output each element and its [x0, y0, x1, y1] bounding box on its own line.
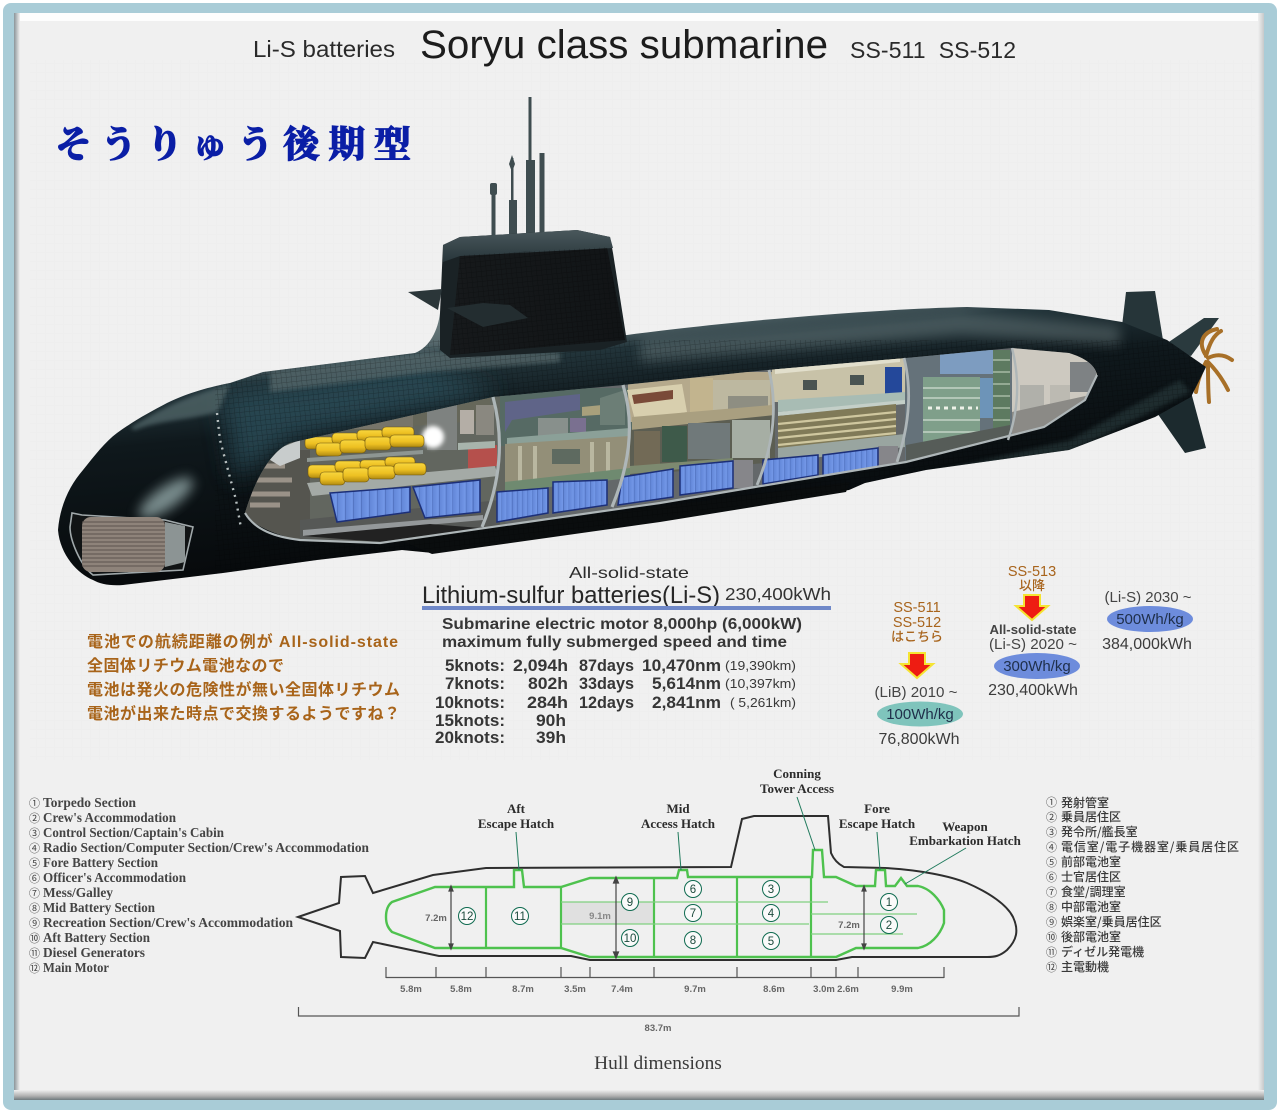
conning tower	[408, 230, 627, 358]
japanese legend	[1046, 794, 1239, 975]
english legend: ⑤	[29, 855, 40, 871]
battery banks	[330, 448, 878, 522]
upper rudder	[1122, 291, 1163, 340]
row: 15 knots	[435, 711, 566, 730]
english legend: ④	[29, 840, 40, 856]
stern planes	[1160, 318, 1219, 356]
row: 7 knots: 802h	[528, 674, 568, 693]
row: 5 knots: 5knots:	[445, 656, 505, 675]
caption: Hull dimensions	[594, 1053, 722, 1074]
battery specification table	[422, 565, 831, 747]
japanese legend: 後部電池室	[1061, 928, 1121, 945]
battery roadmap: 2010 LiB: SS-511	[893, 600, 941, 616]
row: 7 knots: 33days	[579, 674, 634, 693]
main title: Soryu class submarine	[420, 23, 828, 67]
masts	[490, 97, 544, 240]
row: 10 knots: ( 5,261km)	[730, 696, 796, 710]
motor specs: Submarine electric motor 8,000hp (6,000kW)	[442, 616, 802, 633]
japanese legend: ディゼル発電機	[1061, 943, 1144, 960]
arrow: SS-511 down	[901, 653, 933, 678]
japanese legend: ⑥	[1046, 869, 1057, 885]
english legend: ⑪	[29, 945, 40, 961]
japanese legend: ④	[1046, 839, 1057, 855]
japanese legend: ⑧	[1046, 899, 1057, 915]
row: 20 knots: 20knots:	[435, 728, 505, 747]
underline	[422, 606, 831, 610]
battery roadmap: 2010 LiB: はこちら	[891, 629, 943, 644]
hull dimensions diagram	[298, 766, 1022, 1074]
label: conning tower access: Conning	[773, 766, 821, 781]
note in orange: 電池が出来た時点で交換するようですね？	[87, 704, 400, 723]
section ruler	[386, 967, 944, 978]
compartment: main motor	[1012, 348, 1097, 434]
english legend: Torpedo Section	[43, 795, 136, 810]
sonar bay	[70, 513, 193, 575]
height labels	[425, 911, 860, 931]
overall length ruler	[298, 1007, 1019, 1016]
submarine cutaway illustration	[58, 97, 1232, 590]
english legend: Officer's Accommodation	[43, 870, 186, 885]
lower rudder	[1155, 392, 1206, 453]
japanese legend: ①	[1046, 794, 1057, 810]
height labels: 9.1m	[589, 911, 611, 922]
arrow: SS-513 down	[1016, 595, 1048, 620]
japanese legend: 乗員居住区	[1061, 808, 1121, 825]
subtitle: Li-S batteries: Li-S batteries	[253, 36, 395, 62]
battery roadmap: 2010 LiB: (LiB) 2010 ~	[874, 685, 958, 701]
section lengths: 9.7m	[684, 984, 706, 995]
row: 7 knots	[445, 674, 796, 693]
english legend: Control Section/Captain's Cabin	[43, 825, 224, 840]
section lengths: 5.8m	[400, 984, 422, 995]
label: fore escape hatch: Fore	[864, 801, 890, 816]
compartment numbers	[458, 880, 898, 950]
height labels: 7.2m	[838, 920, 860, 931]
battery heading: All-solid-state	[569, 565, 689, 582]
section lengths: 3.5m	[564, 984, 586, 995]
english legend: Recreation Section/Crew's Accommodation	[43, 915, 293, 930]
label: weapon embarkation hatch: Weapon	[942, 819, 988, 834]
label: aft escape hatch: Escape Hatch	[478, 816, 555, 831]
propeller	[1196, 329, 1232, 402]
height arrows	[449, 877, 866, 958]
section lengths	[400, 984, 913, 995]
english legend: ⑥	[29, 870, 40, 886]
compartment: torpedo room	[245, 395, 505, 545]
battery roadmap: 2030 Li-S: 384,000kWh	[1102, 636, 1192, 653]
row: 5 knots	[445, 656, 796, 675]
english legend: Crew's Accommodation	[43, 810, 176, 825]
section lengths: 8.6m	[763, 984, 785, 995]
compartment numbers: 8	[690, 935, 696, 947]
english legend: ⑧	[29, 900, 40, 916]
japanese legend: 電信室/電子機器室/乗員居住区	[1061, 838, 1239, 855]
row: 20 knots	[435, 728, 566, 747]
label: mid access hatch: Access Hatch	[641, 816, 716, 831]
note in orange: 全固体リチウム電池なので	[87, 656, 284, 675]
english legend: Fore Battery Section	[43, 855, 158, 870]
section lengths: 9.9m	[891, 984, 913, 995]
hull highlights	[130, 312, 1205, 590]
row: 20 knots: 39h	[536, 728, 566, 747]
compartment: diesel generators	[905, 350, 1012, 461]
hull rivet line	[217, 413, 241, 528]
compartment numbers: 1	[886, 897, 892, 909]
english legend	[29, 795, 369, 976]
label: fore escape hatch: Escape Hatch	[839, 816, 916, 831]
japanese legend: 士官居住区	[1061, 868, 1121, 885]
japanese legend: ⑪	[1046, 944, 1057, 960]
sail plane far side	[408, 289, 442, 310]
energy density: 300Wh/kg: 300Wh/kg	[1003, 658, 1071, 675]
english legend: ⑫	[29, 960, 40, 976]
japanese legend: ⑩	[1046, 929, 1057, 945]
hull body	[58, 307, 1206, 585]
pressure hull outline	[386, 850, 944, 957]
outer hull outline	[298, 816, 1016, 960]
english legend: Aft Battery Section	[43, 930, 150, 945]
row: 5 knots: 2,094h	[513, 656, 568, 675]
compartment: mess and berths	[772, 354, 908, 468]
label: weapon embarkation hatch: Embarkation Hatch	[909, 833, 1022, 848]
bulkheads and decks	[486, 877, 917, 957]
battery roadmap: 2020 Li-S: SS-513	[1008, 564, 1056, 580]
english legend: ①	[29, 795, 40, 811]
japanese legend: 発令所/艦長室	[1061, 823, 1138, 840]
compartment numbers: 9	[627, 897, 633, 909]
japanese legend: ②	[1046, 809, 1057, 825]
row: 7 knots: 7knots:	[445, 674, 505, 693]
row: 5 knots: (19,390km)	[725, 659, 796, 673]
compartment: officer quarters and mess	[627, 372, 775, 488]
compartment numbers: 6	[690, 884, 696, 896]
compartment numbers: 12	[461, 911, 473, 923]
row: 10 knots: 2,841nm	[652, 693, 721, 712]
battery roadmap: 2020 Li-S: (Li-S) 2020 ~	[989, 637, 1077, 653]
compartment numbers: 3	[768, 884, 774, 896]
row: 10 knots	[435, 693, 796, 712]
english legend: ⑩	[29, 930, 40, 946]
label: aft escape hatch: Aft	[507, 801, 525, 816]
japanese legend: ⑦	[1046, 884, 1057, 900]
row: 10 knots: 284h	[527, 693, 568, 712]
english legend: ⑦	[29, 885, 40, 901]
section lengths: 5.8m	[450, 984, 472, 995]
english legend: Diesel Generators	[43, 945, 145, 960]
section lengths: 8.7m	[512, 984, 534, 995]
english legend: Radio Section/Computer Section/Crew's Accommodation	[43, 840, 369, 855]
compartment numbers: 10	[624, 933, 636, 945]
row: 15 knots: 15knots:	[435, 711, 505, 730]
capacity: 230,400kWh	[725, 584, 831, 604]
compartment: control room	[500, 388, 632, 492]
compartment numbers: 7	[690, 908, 696, 920]
section lengths: 2.6m	[837, 984, 859, 995]
english legend: ③	[29, 825, 40, 841]
battery name: Lithium-sulfur batteries(Li-S)	[422, 582, 720, 609]
english legend: Main Motor	[43, 960, 109, 975]
section lengths: 7.4m	[611, 984, 633, 995]
battery roadmap: 2020 Li-S: All-solid-state	[990, 622, 1076, 637]
compartment numbers: 11	[514, 911, 526, 923]
note in orange: 電池は発火の危険性が無い全固体リチウム	[87, 680, 400, 699]
gray compartment band	[561, 902, 654, 924]
energy density: 100Wh/kg: 100Wh/kg	[886, 706, 954, 723]
japanese legend: 発射管室	[1061, 794, 1109, 811]
japanese legend: 娯楽室/乗員居住区	[1061, 913, 1162, 930]
speed and time caption: maximum fully submerged speed and time	[442, 634, 787, 651]
japanese legend: ⑨	[1046, 914, 1057, 930]
japanese legend: 食堂/調理室	[1061, 883, 1126, 900]
row: 15 knots: 90h	[536, 711, 566, 730]
energy density: 100Wh/kg	[877, 702, 963, 726]
cutaway rim and bulkheads	[245, 348, 1097, 543]
english legend: ②	[29, 810, 40, 826]
label: mid access hatch: Mid	[666, 801, 690, 816]
compartment numbers: 5	[768, 936, 774, 948]
overall length: 83.7m	[645, 1023, 671, 1034]
japanese legend: ③	[1046, 824, 1057, 840]
english legend: ⑨	[29, 915, 40, 931]
hull numbers: SS-511 SS-512	[850, 37, 1016, 63]
torpedoes	[305, 427, 426, 485]
row: 7 knots: 5,614nm	[652, 674, 721, 693]
battery roadmap: 2020 Li-S: 以降	[1019, 578, 1045, 593]
japanese heading: そうりゅう後期型	[55, 114, 411, 168]
japanese legend: 中部電池室	[1061, 898, 1121, 915]
leader lines	[516, 797, 966, 884]
keel	[400, 482, 850, 554]
row: 5 knots: 87days	[579, 656, 634, 675]
title	[253, 23, 1016, 67]
note in orange	[87, 632, 400, 723]
row: 7 knots: (10,397km)	[725, 677, 796, 691]
japanese legend: ⑤	[1046, 854, 1057, 870]
japanese legend: ⑫	[1046, 959, 1057, 975]
section lengths: 3.0m	[813, 984, 835, 995]
energy density: 500Wh/kg: 500Wh/kg	[1116, 611, 1184, 628]
row: 5 knots: 10,470nm	[642, 656, 721, 675]
height labels: 7.2m	[425, 913, 447, 924]
row: 10 knots: 10knots:	[435, 693, 505, 712]
compartment numbers: 4	[768, 908, 775, 920]
battery roadmap: 2020 Li-S	[988, 564, 1080, 699]
row: 10 knots: 12days	[579, 693, 634, 712]
label: conning tower access: Tower Access	[760, 781, 834, 796]
sail plane near side	[447, 303, 528, 327]
compartment numbers: 2	[886, 920, 892, 932]
battery roadmap: 2020 Li-S: 230,400kWh	[988, 682, 1078, 699]
english legend: Mid Battery Section	[43, 900, 155, 915]
note in orange: 電池での航続距離の例が All-solid-state	[87, 632, 398, 651]
battery roadmap: 2030 Li-S	[1102, 590, 1193, 653]
battery roadmap: 2030 Li-S: (Li-S) 2030 ~	[1104, 590, 1192, 606]
japanese legend: 前部電池室	[1061, 853, 1121, 870]
battery roadmap: 2010 LiB	[874, 600, 963, 748]
english legend: Mess/Galley	[43, 885, 113, 900]
japanese legend: 主電動機	[1061, 958, 1109, 975]
battery roadmap: 2010 LiB: 76,800kWh	[879, 731, 959, 748]
battery roadmap: 2010 LiB: SS-512	[893, 615, 941, 631]
interior cutaway	[240, 340, 1110, 550]
